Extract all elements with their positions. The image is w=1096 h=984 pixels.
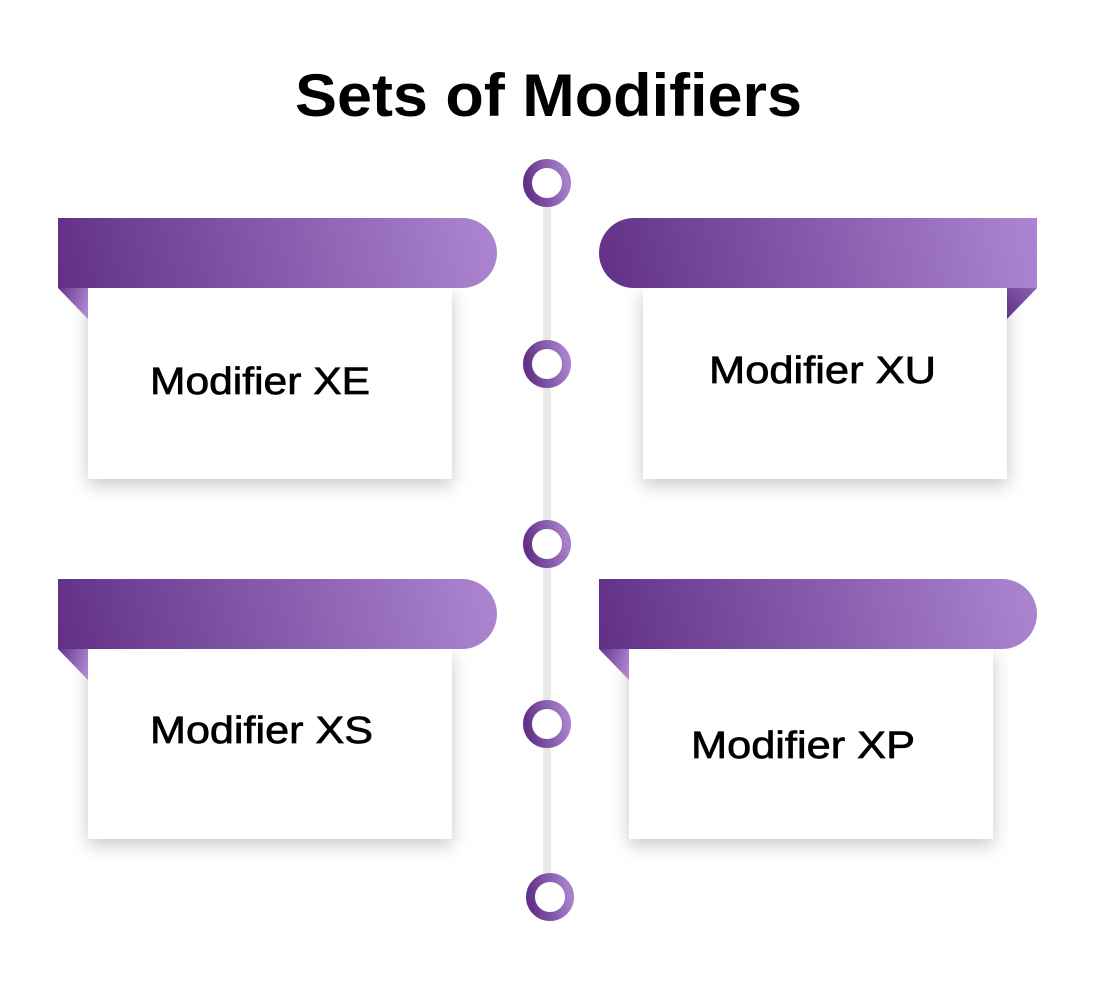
ribbon fold xyxy=(1007,288,1037,319)
panel: Modifier XU xyxy=(599,218,1037,479)
label: Modifier XU xyxy=(709,350,936,392)
card body xyxy=(88,649,452,839)
panel: Modifier XS xyxy=(58,579,497,839)
panel: Modifier XP xyxy=(599,579,1037,839)
panel: Modifier XE xyxy=(58,218,497,479)
ribbon fold xyxy=(58,288,88,319)
ribbon band xyxy=(58,579,497,649)
ribbon band xyxy=(599,218,1037,288)
label: Modifier XP xyxy=(691,725,915,767)
ribbon band xyxy=(58,218,497,288)
card body xyxy=(629,649,993,839)
timeline node 5 xyxy=(530,878,570,916)
ribbon fold xyxy=(58,649,88,680)
card body xyxy=(88,288,452,479)
timeline node 3 xyxy=(528,524,566,564)
label: Modifier XE xyxy=(150,361,370,403)
timeline connector line xyxy=(543,200,551,873)
timeline node 4 xyxy=(528,704,566,744)
timeline node 2 xyxy=(528,344,566,384)
title: Sets of Modifiers xyxy=(295,62,802,129)
card body xyxy=(643,288,1007,479)
ribbon fold xyxy=(599,649,629,680)
timeline node 1 xyxy=(528,164,566,202)
label: Modifier XS xyxy=(150,710,373,752)
ribbon band xyxy=(599,579,1037,649)
